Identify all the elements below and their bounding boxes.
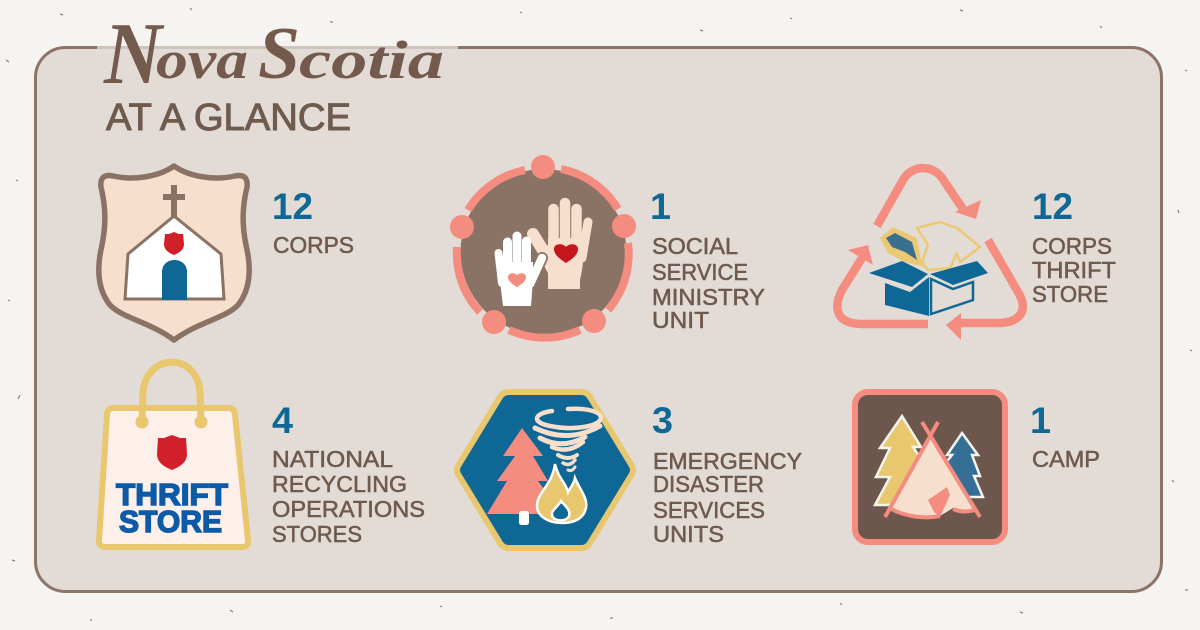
stat: 4 national recycling operations stores: OPERATIONS [272, 496, 425, 522]
title: Nova Scotia [103, 6, 444, 103]
stat: 1 social service ministry unit: SOCIAL [652, 233, 738, 259]
icon: helping hands [450, 155, 636, 338]
title: Nova Scotia: N [103, 6, 165, 103]
stat: 3 emergency disaster services units: UNITS [653, 521, 724, 547]
stat: 4 national recycling operations stores: 4 [272, 400, 293, 441]
stat: 1 social service ministry unit: MINISTRY [652, 284, 765, 310]
title: Nova Scotia: S [258, 13, 300, 95]
stat: 12 corps thrift store: STORE [1032, 281, 1108, 307]
title: Nova Scotia: ova [156, 30, 248, 90]
icon: thrift store bag: STORE [119, 504, 222, 539]
stat: 12 corps thrift store: CORPS [1032, 233, 1112, 259]
stat: 12 corps thrift store: 12 [1032, 186, 1073, 227]
stat: 1 social service ministry unit: SERVICE [652, 259, 748, 285]
stat: 12 corps: 12 [272, 186, 313, 227]
icon: thrift store bag: THRIFT [116, 477, 228, 512]
icon: camp [855, 392, 1005, 542]
icon: thrift store bag [99, 362, 248, 547]
icon: church shield [99, 166, 249, 340]
stat: 4 national recycling operations stores: RECYCLING [272, 471, 407, 497]
stat: 12 corps [272, 186, 354, 258]
stat: 3 emergency disaster services units [652, 400, 802, 547]
stat: 4 national recycling operations stores: STORES [272, 521, 362, 547]
stat: 12 corps thrift store: THRIFT [1032, 257, 1116, 283]
stat: 3 emergency disaster services units: SERVICES [653, 497, 765, 523]
icon: emergency hexagon [457, 392, 633, 548]
stat: 1 social service ministry unit [650, 186, 765, 333]
stat: 1 camp: 1 [1030, 400, 1051, 441]
title: Nova Scotia: cotia [299, 30, 444, 90]
stat: 1 social service ministry unit: 1 [650, 186, 671, 227]
stat: 4 national recycling operations stores [272, 400, 425, 547]
stat: 1 camp: CAMP [1032, 446, 1100, 472]
stat: 1 social service ministry unit: UNIT [652, 307, 709, 333]
stat: 1 camp [1030, 400, 1100, 472]
icon: recycling box [837, 168, 1023, 340]
stat: 3 emergency disaster services units: EMERGENCY [653, 448, 802, 474]
stat: 12 corps thrift store [1032, 186, 1116, 307]
stat: 4 national recycling operations stores: NATIONAL [272, 446, 393, 472]
subtitle: AT A GLANCE: AT A GLANCE [106, 97, 351, 139]
stat: 3 emergency disaster services units: DISASTER [653, 471, 764, 497]
stat: 3 emergency disaster services units: 3 [652, 400, 673, 441]
stat: 12 corps: CORPS [273, 232, 354, 258]
